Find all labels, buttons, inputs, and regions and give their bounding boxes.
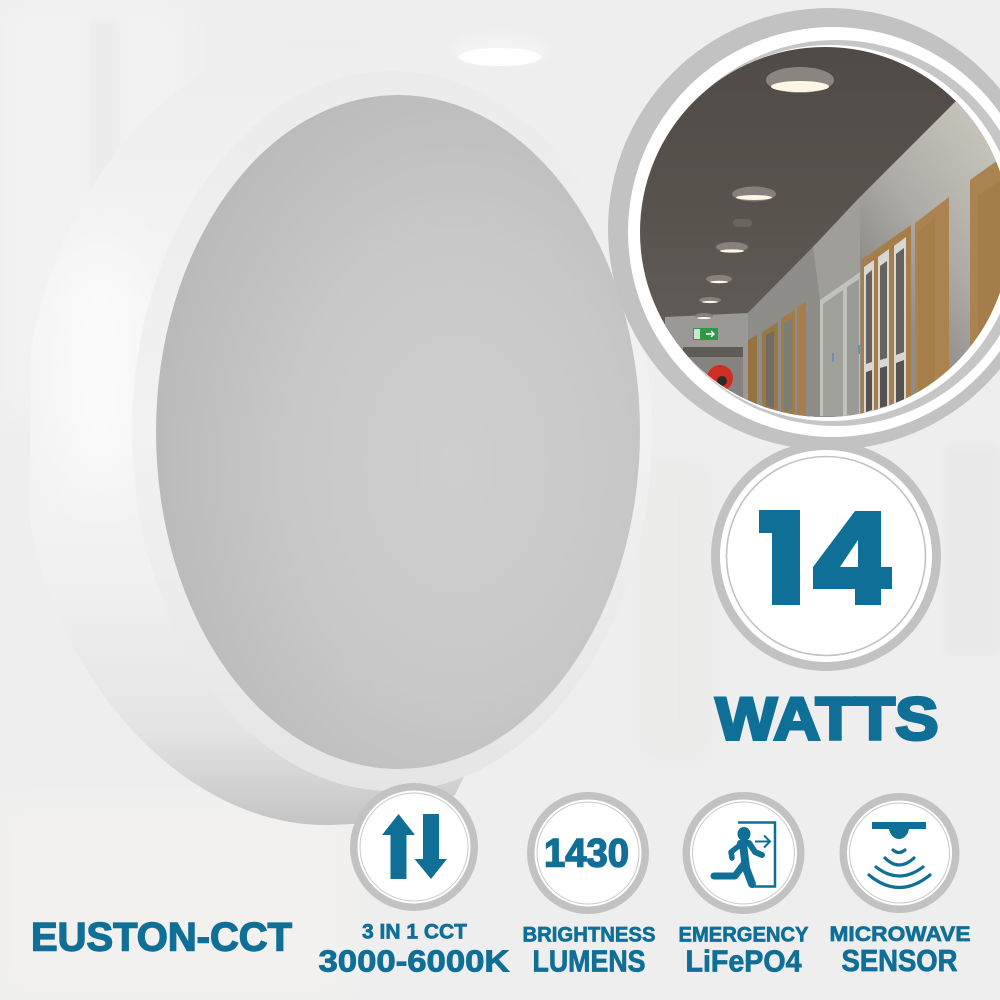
label: EMERGENCY (678, 924, 808, 946)
lamp rim (132, 71, 652, 791)
feature: 3 in 1 CCT (318, 783, 510, 978)
far doors (748, 335, 757, 405)
ceiling light 6 (695, 313, 713, 319)
feature: emergency (678, 792, 808, 978)
ceiling light 5 (699, 297, 721, 303)
label: BRIGHTNESS (522, 924, 656, 946)
wooden door (915, 197, 949, 397)
exit sign (693, 328, 718, 340)
product: round bulkhead light (58, 95, 640, 825)
value: 3000-6000K (318, 944, 510, 978)
lamp diffuser lens (156, 95, 640, 769)
badge (527, 792, 649, 914)
feature: brightness (522, 792, 656, 978)
icon: lumen value: 1430 (544, 832, 629, 876)
value: LiFePO4 (686, 944, 802, 978)
side wall (748, 70, 1000, 420)
label: 3 IN 1 CCT (362, 920, 467, 944)
wattage badge (711, 441, 941, 671)
fire hose reel (707, 365, 733, 391)
ceiling light 1 (766, 67, 834, 93)
wattage label: WATTS (716, 686, 938, 752)
back wall (665, 313, 748, 400)
badge (840, 793, 960, 913)
product name: EUSTON-CCT (31, 916, 292, 960)
wattage number (759, 510, 892, 605)
icon: up and down arrows (382, 814, 447, 879)
value: SENSOR (842, 943, 958, 978)
ceiling light 2 (732, 186, 776, 202)
ceiling light glow (459, 48, 541, 66)
label: MICROWAVE (830, 923, 970, 946)
ceiling light 4 (706, 275, 732, 283)
wattage number: 4 (817, 490, 888, 628)
badge (682, 792, 804, 914)
feature: microwave sensor (830, 793, 970, 978)
value: LUMENS (532, 944, 646, 978)
glazed door (861, 225, 911, 414)
lamp body (30, 37, 600, 825)
white double door (820, 272, 860, 416)
badge (350, 783, 478, 911)
far right door (970, 155, 1000, 357)
inset photo: corridor installation (608, 8, 1000, 450)
wattage number: 1 (741, 487, 811, 628)
icon: sensor waves (869, 822, 930, 888)
ceiling light 3 (716, 242, 748, 253)
icon: running person exit (714, 822, 775, 886)
